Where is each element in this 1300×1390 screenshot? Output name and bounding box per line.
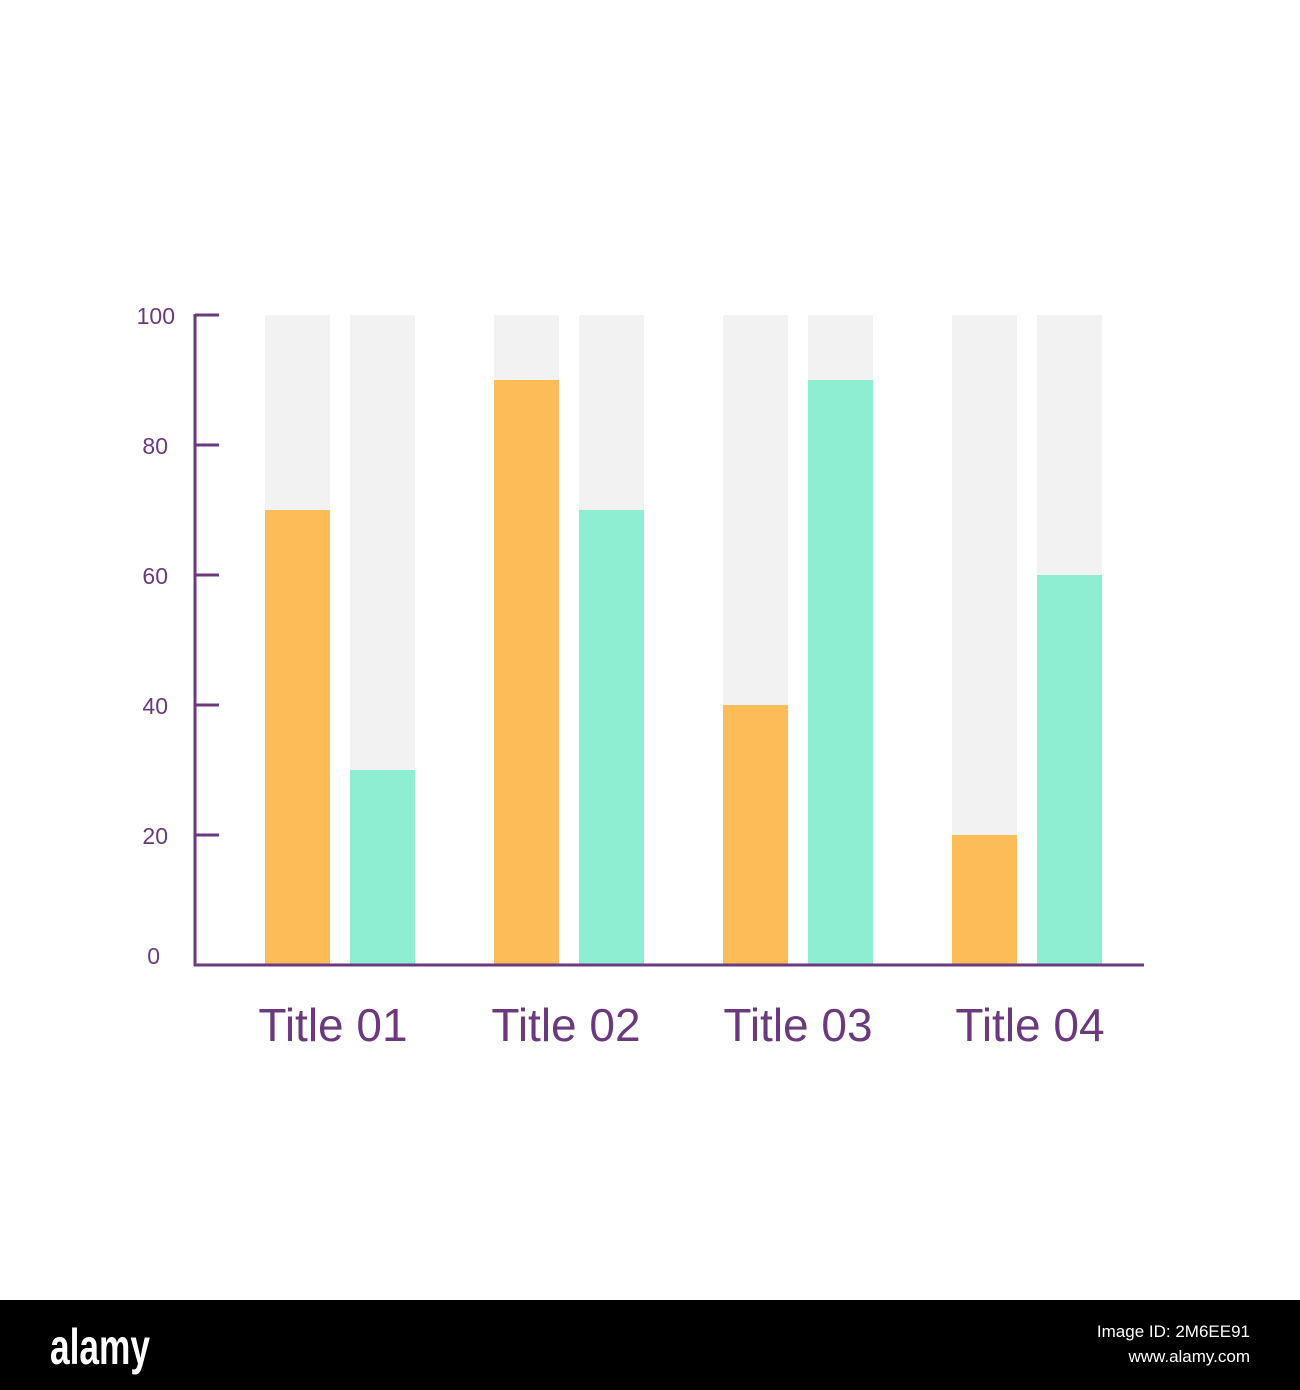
footer bar: [0, 1300, 1300, 1390]
y-axis labels: 60: [142, 563, 168, 589]
x-axis labels: Title 03: [723, 999, 873, 1051]
x-axis labels: Title 01: [258, 999, 408, 1051]
footer bar: Image ID: 2M6EE91: [1097, 1322, 1250, 1341]
teal bars: [350, 380, 1102, 965]
y-axis labels: 100: [137, 303, 175, 329]
y-axis labels: 80: [142, 433, 168, 459]
footer bar: alamy: [50, 1319, 150, 1375]
axes: [194, 314, 1144, 966]
y-axis labels: [137, 303, 175, 969]
x-axis labels: Title 04: [955, 999, 1105, 1051]
bar background tracks: [265, 315, 1102, 965]
y-axis labels: 20: [142, 823, 168, 849]
y-axis labels: 0: [147, 943, 160, 969]
y-axis labels: 40: [142, 693, 168, 719]
orange bars: [265, 380, 1017, 965]
x-axis labels: [258, 999, 1105, 1051]
footer bar: www.alamy.com: [1127, 1347, 1250, 1366]
x-axis labels: Title 02: [491, 999, 641, 1051]
